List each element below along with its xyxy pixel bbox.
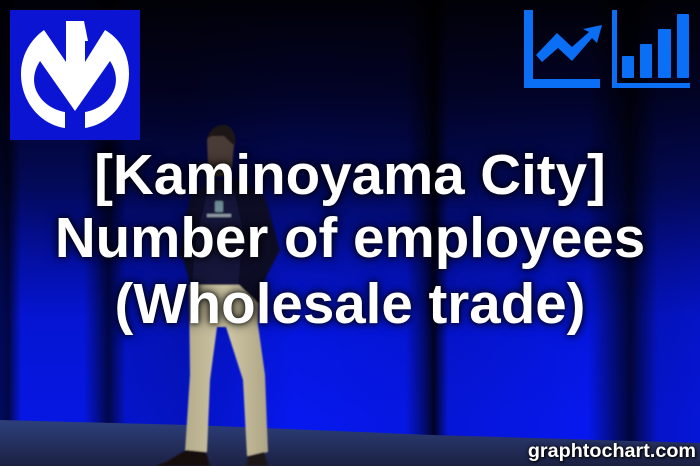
icon: bar chart <box>612 10 690 88</box>
shoes <box>156 450 210 466</box>
watermark: graphtochart.com <box>528 440 696 462</box>
icon: line chart <box>524 10 602 88</box>
logo badge <box>10 10 140 140</box>
logo mark <box>21 21 129 130</box>
stage floor <box>0 420 700 466</box>
title: [Kaminoyama City] <box>94 143 606 206</box>
title: (Wholesale trade) <box>115 272 585 335</box>
shirt badge <box>215 201 223 212</box>
icon: line chart and bar chart <box>524 10 690 88</box>
title: Number of employees <box>55 206 645 269</box>
head <box>207 128 234 176</box>
trousers <box>185 285 268 456</box>
presenter <box>156 125 280 466</box>
shirt <box>192 190 243 285</box>
title <box>50 143 650 342</box>
jacket <box>179 180 280 305</box>
